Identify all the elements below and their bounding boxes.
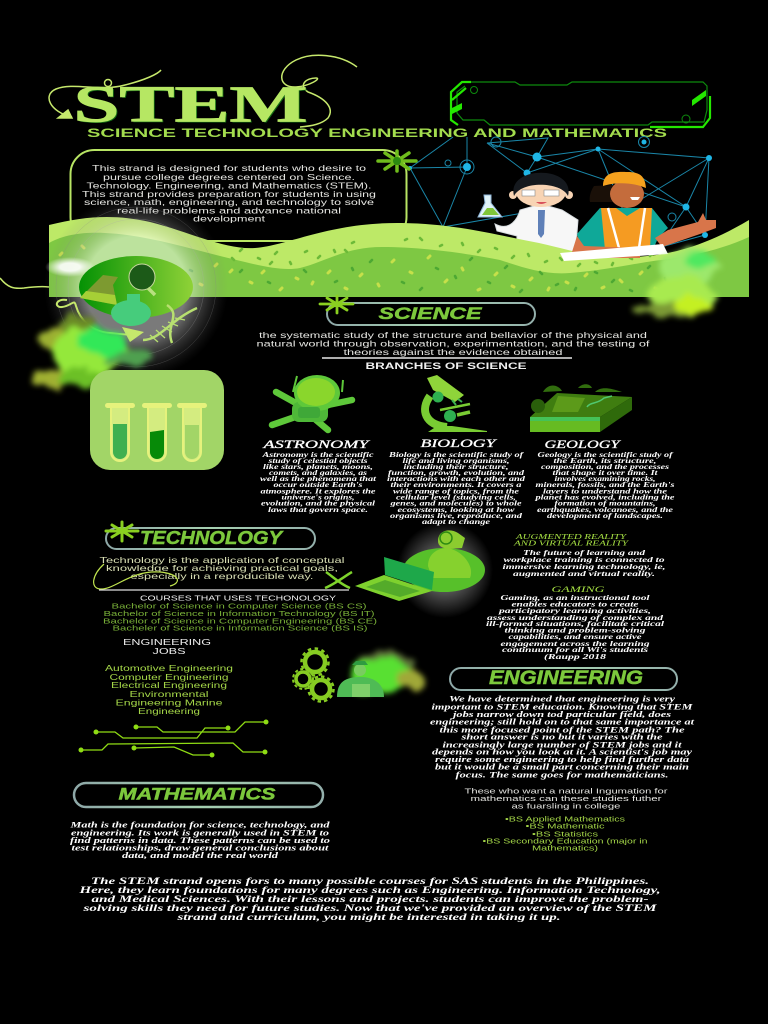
icon: round flask (111, 294, 151, 326)
branch: biology: adapt to change (422, 518, 490, 526)
branch: geology: composition, and the processes (541, 463, 669, 471)
engineering text: focus. The same goes for mathematicians. (456, 770, 668, 780)
science description (256, 330, 650, 357)
engineering jobs: ENGINEERING (123, 637, 211, 647)
engineering jobs (105, 637, 233, 716)
mathematics pursuits: •BS Statistics (532, 830, 598, 838)
intro panel: pursue college degrees centered on Science. (103, 172, 355, 182)
engineering jobs: Electrical Engineering (111, 680, 227, 690)
branch: geology: layers to understand how the (543, 488, 667, 496)
engineering text: but it would be a small part concerning their main (435, 762, 690, 772)
decorative arrow squiggle (57, 300, 144, 342)
heading: engineering: ENGINEERING (489, 668, 643, 689)
technology description (100, 555, 345, 581)
icon: geology block (530, 384, 632, 432)
technology right: AR and VR: AND VIRTUAL REALITY (512, 540, 630, 548)
branch: biology: genes, and molecules) to whole (389, 500, 522, 508)
technology right: gaming: capabilities, and ensure active (508, 633, 642, 641)
branch: astronomy: ASTRONOMY (262, 437, 371, 451)
technology right: gaming: (Raupp 2018 (544, 653, 607, 661)
decorative squiggle left (0, 278, 49, 288)
mathematics pursuits (464, 786, 668, 852)
technology right: AR and VR: The future of learning and (523, 549, 646, 557)
intro panel: This strand provides preparation for students in using (82, 189, 376, 199)
engineering text: increasingly large number of STEM jobs and it (442, 740, 683, 750)
engineering text: important to STEM education. Knowing that STEM (432, 702, 694, 712)
technology right: AR and VR: immersive learning technology, ie, (502, 563, 666, 571)
illustration: scientist (478, 173, 578, 258)
engineering text: engineering; still hold on to that same importance at (430, 718, 695, 726)
branch: geology: the Earth, its structure, (554, 457, 657, 465)
technology right: gaming: continuum for all Wi's students (502, 646, 648, 654)
courses list (103, 594, 378, 632)
technology right: AR and VR: workplace training is connected to (504, 556, 665, 564)
mathematics text (69, 820, 331, 860)
closing paragraph: and Medical Sciences. With their lessons and projects. students can improve the problem- (92, 895, 648, 905)
glowing lab circle (44, 195, 228, 379)
mathematics pursuits: These who want a natural Ingumation for (464, 786, 668, 796)
branch: geology: Geology is the scientific study of (538, 451, 673, 459)
science description: the systematic study of the structure and bellavior of the physical and (259, 330, 647, 340)
engineering jobs: Engineering Marine (116, 698, 223, 708)
branch: biology: wide range of topics, from the (393, 488, 519, 496)
intro panel: Technology. Engineering, and Mathematics (STEM). (86, 180, 372, 190)
smoke: right (634, 250, 719, 318)
icon: leaf burst top (378, 151, 416, 171)
technology right: gaming: engagement across the learning (500, 640, 650, 648)
technology right: gaming: ill-formed situations, facilitate critical (486, 620, 664, 628)
branch: geology: that shape it over time. It (552, 469, 659, 477)
branch: astronomy: evolution, and the physical (261, 500, 375, 508)
divider (99, 589, 349, 591)
technology right: AR and VR (502, 533, 666, 578)
closing paragraph: solving skills they need for future studies. Now that we've provided an overview of the STEM (82, 904, 657, 914)
branch: biology: ecosystems, looking at how (398, 506, 515, 514)
network of teal lines and nodes (408, 136, 712, 250)
engineering text: jobs narrow down tod particular field, does (450, 710, 671, 719)
intro panel: science, math, engineering, and technology to solve (84, 197, 374, 207)
branch: geology (534, 437, 675, 520)
branch: astronomy: laws that govern space. (268, 506, 368, 514)
intro panel (70, 150, 406, 241)
branch: astronomy: comets, and galaxies, as (269, 469, 367, 477)
science description: theories against the evidence obtained (344, 347, 563, 357)
icon: microscope (425, 375, 487, 432)
mathematics text: test relationships, draw general conclusions about (72, 844, 330, 852)
circuit lines (78, 720, 268, 758)
branch: astronomy: universe's origins, (282, 494, 355, 502)
heading: technology (106, 528, 315, 549)
courses list: Bachelor of Science in Computer Engineering (BS CE) (103, 616, 378, 626)
panel: test tubes (90, 370, 224, 470)
divider (322, 357, 572, 359)
branch: biology: including their structure, (404, 463, 509, 471)
smoke: left (29, 315, 152, 388)
mathematics text: find patterns in data. These patterns can be used to (70, 836, 330, 845)
icon: gears (293, 648, 334, 702)
branch: geology: earthquakes, volcanoes, and the (537, 506, 673, 514)
branch: geology: planet has evolved, including the (534, 494, 674, 502)
mathematics pursuits: •BS Mathematic (526, 822, 605, 830)
sci-fi empty frame (451, 82, 710, 127)
branch: biology: interactions with each other and (387, 475, 526, 483)
mathematics pursuits: •BS Secondary Education (major in (482, 836, 648, 846)
engineering text: We have determined that engineering is very (449, 694, 676, 704)
technology description: especially in a reproducible way. (130, 571, 314, 581)
technology right: gaming: participatory learning activities, (497, 607, 651, 615)
intro panel: real-life problems and advance national (117, 206, 341, 216)
branch: astronomy (260, 437, 378, 514)
green hills band (49, 217, 749, 297)
heading: mathematics: MATHEMATICS (118, 784, 276, 804)
mathematics text: Math is the foundation for science, technology, and (69, 820, 331, 830)
heading: engineering (450, 668, 677, 690)
technology right: gaming: Gaming, as an instructional tool (500, 594, 650, 602)
icon: leaf burst technology (106, 522, 138, 541)
technology right: AR and VR: AUGMENTED REALITY (514, 533, 628, 541)
technology right: AR and VR: augmented and virtual reality. (513, 570, 655, 578)
branch: biology: BIOLOGY (420, 436, 497, 450)
mathematics pursuits: •BS Applied Mathematics (505, 814, 625, 824)
intro panel: development (193, 214, 266, 224)
technology right: gaming: assess understanding of complex and (487, 614, 664, 622)
technology right: gaming: GAMING (552, 584, 604, 594)
closing paragraph (78, 877, 661, 923)
technology right: gaming: enables educators to create (512, 600, 638, 608)
branch: astronomy: study of celestial objects (267, 457, 368, 465)
branch: geology: formation of mountains, (554, 500, 656, 508)
icon: magnifier (129, 264, 155, 295)
heading: science (327, 303, 535, 325)
icon: flask (80, 275, 118, 305)
branch: biology: life and living organisms, (402, 457, 510, 465)
branch: astronomy: atmosphere. It explores the (260, 488, 376, 496)
engineering jobs: Environmental (130, 689, 209, 699)
heading: branches of science: BRANCHES OF SCIENCE (366, 361, 526, 371)
title: STEM (74, 76, 309, 134)
heading: science: SCIENCE (378, 304, 482, 323)
branch: biology: their environments. It covers a (390, 481, 522, 489)
engineering text (430, 694, 695, 780)
scattered leaves (60, 238, 692, 292)
courses list: Bacheler of Science in Information Science (BS IS) (112, 624, 368, 632)
engineering text: this more focused point of the STEM path? The (440, 726, 685, 734)
icon: crossed leaves (325, 572, 352, 588)
engineering text: short answer is no but it varies with the (460, 732, 663, 742)
decorative squiggle technology (94, 564, 177, 589)
intro panel: This strand is designed for students who desire to (92, 163, 366, 173)
smoke: engineering (348, 650, 428, 693)
courses list: Bachelor of Science in Computer Science (BS CS) (112, 602, 367, 610)
branch: biology: function, growth, evolution, and (388, 469, 525, 477)
illustration: robot and laptop (355, 522, 493, 618)
heading: mathematics (74, 783, 323, 807)
closing paragraph: strand and curriculum, you might be interested in taking it up. (176, 913, 560, 923)
subtitle: SCIENCE TECHNOLOGY ENGINEERING AND MATHEMATICS (87, 126, 667, 140)
science description: natural world through observation, experimentation, and the testing of (256, 338, 650, 348)
technology description: knowledge for achieving practical goals, (106, 563, 338, 573)
technology right: gaming (486, 584, 664, 661)
branch: astronomy: Astronomy is the scientific (261, 451, 374, 459)
mathematics text: data, and model the real world (122, 851, 280, 860)
heading: technology: TECHNOLOGY (140, 528, 284, 548)
branch: biology: cellular level (studying cells, (396, 494, 516, 502)
branch: astronomy: well as the phenomena that (260, 475, 378, 483)
engineering jobs: Automotive Engineering (105, 663, 233, 673)
mathematics pursuits: as fuarsling in college (512, 802, 620, 810)
closing paragraph: The STEM strand opens fors to many possible courses for SAS students in the Philippines. (91, 877, 649, 887)
engineering jobs: Computer Engineering (110, 672, 229, 682)
courses list: Bachelor of Science in Information Technology (BS IT) (104, 609, 375, 618)
closing paragraph: Here, they learn foundations for many degrees such as Engineering. Information Technology, (78, 886, 661, 896)
engineering jobs: JOBS (152, 646, 186, 656)
mathematics pursuits: Mathematics) (532, 844, 599, 852)
branch: astronomy: like stars, planets, moons, (263, 463, 373, 471)
mathematics pursuits: mathematics can these studies futher (470, 794, 662, 803)
icon: engineer figure (337, 661, 384, 697)
branch: geology: GEOLOGY (544, 437, 621, 451)
engineering text: depends on how you look at it. A scientist's job may (432, 748, 693, 756)
technology description: Technology is the application of conceptual (100, 555, 345, 565)
title: STEM: STEM (74, 76, 308, 134)
technology right: gaming: thinking and problem-solving (504, 626, 646, 634)
branch: geology: involves examining rocks, (554, 475, 656, 483)
branch: biology: organisms live, reproduce, and (390, 512, 523, 520)
branch: astronomy: occur outside Earth's (274, 481, 363, 489)
branch: geology: development of landscapes. (547, 512, 663, 520)
title: STEM: STEM (75, 78, 309, 134)
branch: biology: Biology is the scientific study of (388, 451, 524, 459)
courses list: COURSES THAT USES TECHONOLOGY (140, 594, 336, 602)
branch: biology (387, 436, 526, 526)
icon: leaf burst science (320, 296, 353, 313)
engineering jobs: Engineering (138, 706, 200, 716)
decorative title swirls (49, 55, 357, 127)
mathematics text: engineering. Its work is generally used in STEM to (71, 828, 329, 838)
branch: geology: minerals, fossils, and the Earth's (536, 481, 675, 489)
engineering text: require some engineering to help find further data (435, 755, 689, 764)
icon: astronaut (272, 375, 352, 430)
illustration: engineer (560, 172, 716, 261)
icon: DNA helix (143, 305, 197, 343)
